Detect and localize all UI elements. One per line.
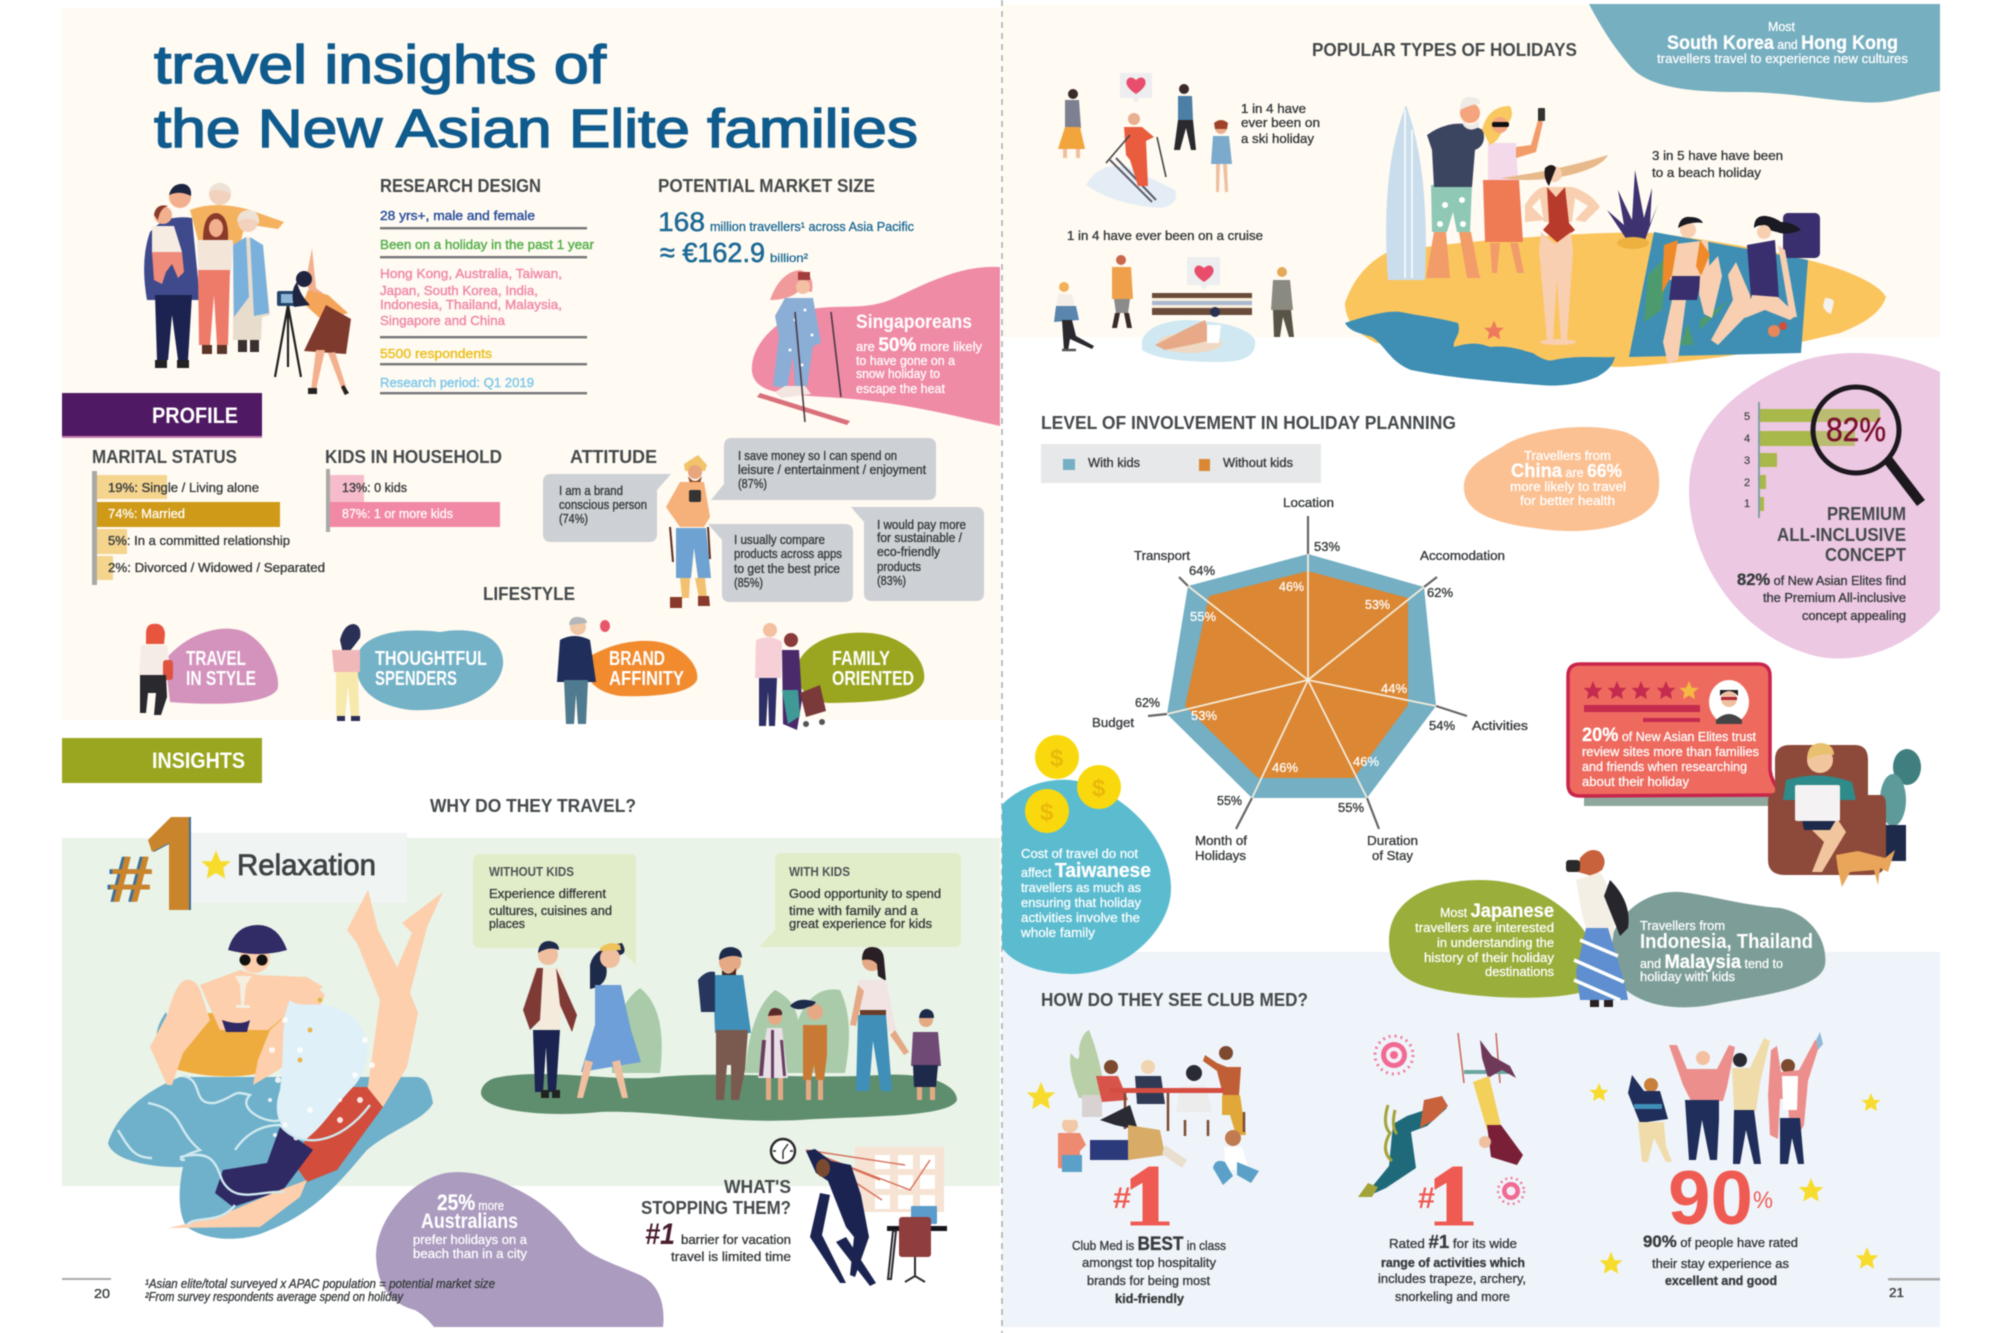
callout: Taiwanese xyxy=(1002,735,1171,974)
heading: research design: RESEARCH DESIGN xyxy=(380,176,541,196)
callout: China: more likely to travel xyxy=(1510,479,1626,494)
chart: marital status: 74%: Married xyxy=(108,506,185,521)
text: Taiwanese callout xyxy=(1020,846,1151,940)
panel: 90 percent rating xyxy=(1590,1032,1880,1288)
footer: left page number and footnotes xyxy=(62,1276,495,1304)
text: holiday condition: Been on a holiday in the past 1 year xyxy=(380,237,595,252)
stat: 168 million: 168 xyxy=(658,207,705,237)
text: Singaporeans callout: snow holiday to xyxy=(856,366,940,381)
heading: how do they see club med: HOW DO THEY SEE CLUB MED? xyxy=(1041,990,1308,1010)
callout: travel in style: IN STYLE xyxy=(186,668,256,690)
callout: sustainable products: eco-friendly xyxy=(877,544,940,559)
text: markets: Singapore and China xyxy=(380,313,506,328)
text: radar axis labels: Holidays xyxy=(1195,848,1247,863)
callout: compare products xyxy=(708,524,853,602)
text: ski holiday: 1 in 4 have xyxy=(1241,101,1306,116)
callout: without kids: WITHOUT KIDS xyxy=(489,864,574,879)
text: review sites: review sites more than families xyxy=(1582,744,1759,759)
panel: left page cream background xyxy=(62,8,1000,720)
callout: Indonesia, Thailand and Malaysia: holiday with kids xyxy=(1640,969,1736,984)
text: kid-friendly description: brands for being most xyxy=(1087,1273,1210,1288)
text: kid-friendly description xyxy=(1072,1234,1226,1306)
callout: travel in style xyxy=(139,624,278,715)
text: kid-friendly description: amongst top hospitality xyxy=(1082,1255,1216,1270)
text: radar axis labels: Transport xyxy=(1134,548,1190,563)
callout: Indonesia, Thailand and Malaysia xyxy=(1606,892,1825,1007)
callout: China: China are 66% xyxy=(1511,461,1622,482)
callout: sustainable products: for sustainable / xyxy=(877,530,962,545)
text: activities description xyxy=(1378,1232,1526,1304)
text: with kids values xyxy=(1135,539,1455,815)
chart: holiday planning radar xyxy=(1092,495,1529,863)
stat: number one xyxy=(1113,1167,1169,1225)
chart: rating bars: 4 xyxy=(1744,433,1750,445)
callout: without kids xyxy=(473,854,636,965)
stat: 90 percent: 90 xyxy=(1668,1156,1753,1241)
callout: save money: I save money so I can spend on xyxy=(738,448,897,463)
callout: brand affinity: AFFINITY xyxy=(609,668,685,690)
text: without kids values: 53% xyxy=(1365,597,1390,612)
text: Singaporeans callout: escape the heat xyxy=(856,381,945,396)
text: without kids values: 46% xyxy=(1353,754,1379,769)
text: radar axis labels: Location xyxy=(1283,495,1334,510)
stat: 90 percent: % xyxy=(1753,1187,1773,1214)
legend: radar chart: Without kids xyxy=(1223,455,1293,470)
text: without kids values: 44% xyxy=(1381,681,1407,696)
callout: brand conscious: conscious person xyxy=(559,497,647,512)
callout: South Korea and Hong Kong: travellers travel to experience new cultures xyxy=(1657,51,1909,66)
panel: premium all-inclusive concept xyxy=(1689,353,1940,659)
text: ski holiday: ever been on xyxy=(1241,115,1320,130)
panel: range of activities xyxy=(1358,1033,1526,1304)
callout: brand conscious xyxy=(543,474,671,542)
text: without kids values: 46% xyxy=(1279,579,1304,594)
text: radar axis labels xyxy=(1092,495,1529,863)
footer: right page number: 21 xyxy=(1889,1285,1904,1300)
text: Singaporeans callout: to have gone on a xyxy=(856,353,956,368)
chart: marital status: 2%: Divorced / Widowed / Separated xyxy=(108,560,325,575)
text: cruise: 1 in 4 have ever been on a cruise xyxy=(1067,228,1263,243)
title: the New Asian Elite families xyxy=(154,99,918,159)
text: markets: Japan, South Korea, India, xyxy=(380,283,538,298)
callout: brand affinity: BRAND xyxy=(609,648,665,670)
callout: without kids: Experience different xyxy=(489,886,606,901)
callout: sustainable products: I would pay more xyxy=(877,517,966,532)
callout: brand affinity xyxy=(557,617,697,724)
stat: number one: # xyxy=(108,842,152,916)
icon: star xyxy=(201,850,231,879)
callout: with kids: WITH KIDS xyxy=(789,864,850,879)
heading: profile: PROFILE xyxy=(152,403,238,428)
text: radar axis labels: Month of xyxy=(1195,833,1247,848)
text: barrier xyxy=(671,1232,791,1264)
icon: board and worker xyxy=(806,1147,947,1286)
text: radar axis labels: Accomodation xyxy=(1420,548,1505,563)
chart: marital status: 19%: Single / Living alone xyxy=(108,480,259,495)
icon: man on armchair with laptop xyxy=(1768,743,1921,887)
callout: sustainable products xyxy=(851,507,984,601)
icon: dancing friends illustration xyxy=(1628,1032,1823,1164)
heading: why do they travel: WHY DO THEY TRAVEL? xyxy=(430,796,636,816)
stat: number one: # xyxy=(1418,1182,1435,1215)
heading: what's stopping them xyxy=(641,1177,791,1218)
callout: Indonesia, Thailand and Malaysia: and Malaysia tend to xyxy=(1640,952,1783,973)
heading: lifestyle: LIFESTYLE xyxy=(483,584,575,604)
panel: kid-friendly xyxy=(1027,1030,1259,1306)
text: activities description: snorkeling and more xyxy=(1395,1289,1510,1304)
heading: insights: INSIGHTS xyxy=(152,748,245,773)
icon: coins: $ xyxy=(1050,745,1064,772)
text: ski holiday: a ski holiday xyxy=(1241,131,1315,146)
text: radar axis labels: Budget xyxy=(1092,715,1134,730)
stat: number one barrier: #1 xyxy=(645,1218,675,1251)
footer: left page number and footnotes: ²From survey respondents average spend on holiday xyxy=(145,1289,404,1304)
callout: China: for better health xyxy=(1520,493,1615,508)
icon: magnifying glass with 82%: 82% xyxy=(1826,411,1886,448)
text: review sites xyxy=(1582,725,1759,789)
callout: Australians: prefer holidays on a xyxy=(413,1232,528,1247)
heading: premium concept: CONCEPT xyxy=(1825,545,1906,565)
callout: compare products: I usually compare xyxy=(734,532,825,547)
text: kid-friendly description: Club Med is BEST in class xyxy=(1072,1234,1226,1255)
callout: Australians: beach than in a city xyxy=(413,1246,527,1261)
text: Singaporeans callout: are 50% more likely xyxy=(856,335,982,356)
chart: rating bars: 1 xyxy=(1744,498,1750,510)
callout: thoughtful spenders xyxy=(332,624,503,721)
callout: Japanese: Most Japanese xyxy=(1440,901,1554,922)
text: rating description: their stay experience as xyxy=(1652,1256,1789,1271)
callout: brand conscious: I am a brand xyxy=(559,483,623,498)
stat: 162.9 billion: ≈ €162.9 xyxy=(660,237,765,268)
text: rating description xyxy=(1643,1232,1798,1288)
panel: attitude xyxy=(543,438,984,608)
text: with kids values: 55% xyxy=(1338,800,1364,815)
heading: level of involvement: LEVEL OF INVOLVEMENT IN HOLIDAY PLANNING xyxy=(1041,413,1456,433)
text: with kids values: 55% xyxy=(1217,793,1242,808)
callout: travel in style: TRAVEL xyxy=(186,648,246,670)
legend: radar chart: With kids xyxy=(1088,455,1140,470)
callout: Australians: Australians xyxy=(421,1210,518,1233)
text: Taiwanese callout: affect Taiwanese xyxy=(1021,860,1151,882)
text: radar axis labels: Activities xyxy=(1472,718,1529,733)
callout: South Korea and Hong Kong xyxy=(1589,4,1940,103)
callout: thoughtful spenders: SPENDERS xyxy=(375,668,457,690)
text: Taiwanese callout: activities involve the xyxy=(1021,910,1140,925)
text: without kids values: 46% xyxy=(1272,760,1298,775)
text: premium description xyxy=(1737,570,1906,623)
panel: potential market size xyxy=(658,176,914,268)
title: travel insights of xyxy=(154,35,607,95)
callout: save money: (87%) xyxy=(738,476,767,491)
icon: trapeze and diver illustration xyxy=(1358,1033,1524,1204)
text: Taiwanese callout: Cost of travel do not xyxy=(1021,846,1138,861)
callout: Japanese: travellers are interested xyxy=(1415,920,1554,935)
callout: Japanese: in understanding the xyxy=(1437,935,1554,950)
callout: compare products: (85%) xyxy=(734,575,763,590)
callout: without kids: cultures, cuisines and xyxy=(489,903,612,918)
panel: right page blue band xyxy=(1002,952,1940,1327)
icon: celebration stars xyxy=(1590,1083,1880,1274)
text: markets xyxy=(380,266,562,328)
callout: save money xyxy=(711,438,936,500)
chart: marital status xyxy=(92,447,325,585)
text: beach holiday: 3 in 5 have have been xyxy=(1652,148,1783,163)
text: million travellers: million travellers¹ across Asia Pacific xyxy=(710,220,914,234)
text: kid-friendly description: kid-friendly xyxy=(1115,1291,1185,1306)
callout: save money: leisure / entertainment / enjoyment xyxy=(738,462,926,477)
callout: Australians xyxy=(376,1172,664,1327)
text: billion: billion² xyxy=(770,251,808,265)
text: barrier: barrier for vacation xyxy=(681,1232,791,1247)
text: rating description: 90% of people have rated xyxy=(1643,1232,1798,1251)
callout: family oriented: FAMILY xyxy=(832,648,891,670)
chart: marital status: 5%: In a committed relationship xyxy=(108,533,290,548)
chart: rating bars: 2 xyxy=(1744,477,1750,489)
heading: premium concept: ALL-INCLUSIVE xyxy=(1777,525,1906,545)
callout: with kids: time with family and a xyxy=(789,903,919,918)
callout: brand conscious: (74%) xyxy=(559,511,588,526)
text: without kids values: 53% xyxy=(1191,708,1217,723)
callout: China: Travellers from xyxy=(1524,448,1611,463)
chart: kids in household xyxy=(325,447,502,532)
text: review sites: about their holiday xyxy=(1582,774,1689,789)
icon: woman photographer xyxy=(1566,850,1629,1007)
icon: magnifying glass with 82% xyxy=(1813,387,1921,503)
text: without kids values xyxy=(1190,579,1407,775)
icon: man relaxing in swimming pool xyxy=(108,890,443,1239)
icon: coins: $ xyxy=(1092,775,1106,802)
text: with kids values: 64% xyxy=(1189,563,1215,578)
stat: number one: # xyxy=(1113,1182,1131,1215)
callout: compare products: products across apps xyxy=(734,546,842,561)
text: Taiwanese callout: ensuring that holiday xyxy=(1021,895,1141,910)
callout: without kids: places xyxy=(489,916,525,931)
text: beach holiday xyxy=(1652,148,1783,180)
text: sample: 28 yrs+, male and female xyxy=(380,208,535,223)
callout: Japanese: history of their holiday xyxy=(1424,950,1555,965)
callout: with kids xyxy=(759,853,961,947)
heading: what's stopping them: WHAT'S xyxy=(724,1177,791,1197)
callout: Indonesia, Thailand and Malaysia: Indonesia, Thailand xyxy=(1640,931,1813,953)
icon: rating stars xyxy=(1584,681,1698,699)
text: with kids values: 53% xyxy=(1314,539,1340,554)
heading: attitude: ATTITUDE xyxy=(570,447,657,467)
icon: family group and photographer illustration xyxy=(144,183,351,395)
icon: couple xyxy=(523,941,641,1098)
text: markets: Indonesia, Thailand, Malaysia, xyxy=(380,297,562,312)
callout: Australians: 25% more xyxy=(437,1190,504,1215)
panel: what's stopping them xyxy=(641,1139,947,1286)
chart: rating bars: 5 xyxy=(1744,411,1750,423)
callout: South Korea and Hong Kong: Most xyxy=(1768,19,1795,34)
heading: marital status: MARITAL STATUS xyxy=(92,447,237,467)
text: Taiwanese callout: travellers as much as xyxy=(1021,880,1141,895)
icon: coins: $ xyxy=(1040,799,1054,826)
text: respondents: 5500 respondents xyxy=(380,346,493,361)
footer: left page number and footnotes: 20 xyxy=(94,1286,110,1301)
callout: family oriented: ORIENTED xyxy=(832,668,914,690)
callout: with kids: great experience for kids xyxy=(789,916,932,931)
callout: Japanese: destinations xyxy=(1485,964,1554,979)
stat: number one xyxy=(105,817,191,916)
text: with kids values: 62% xyxy=(1427,585,1453,600)
stat: number one: # xyxy=(105,842,149,916)
text: relaxation: Relaxation xyxy=(237,849,376,882)
text: premium description: the Premium All-inclusive xyxy=(1763,590,1906,605)
text: barrier: travel is limited time xyxy=(671,1249,791,1264)
text: markets: Hong Kong, Australia, Taiwan, xyxy=(380,266,562,281)
icon: coins xyxy=(1025,735,1121,833)
callout: thoughtful spenders: THOUGHTFUL xyxy=(375,648,487,670)
text: with kids values: 54% xyxy=(1429,718,1455,733)
text: review sites: 20% of New Asian Elites trust xyxy=(1582,725,1756,746)
panel: lifestyle xyxy=(139,584,924,730)
icon: beach scene xyxy=(1345,97,1886,386)
icon: skier xyxy=(757,270,850,425)
text: premium description: concept appealing xyxy=(1802,608,1906,623)
icon: hiker with camera xyxy=(666,455,711,608)
heading: what's stopping them: STOPPING THEM? xyxy=(641,1198,791,1218)
icon: ski holiday group xyxy=(1058,73,1232,208)
heading: premium concept: PREMIUM xyxy=(1827,504,1906,524)
icon: couple and family illustration xyxy=(481,941,957,1121)
callout: sustainable products: products xyxy=(877,559,921,574)
text: Singaporeans callout xyxy=(856,312,982,396)
panel: left page green band xyxy=(62,838,1000,1186)
chart: kids in household: 13%: 0 kids xyxy=(342,480,407,495)
callout: with kids: Good opportunity to spend xyxy=(789,886,941,901)
panel: right page cream background xyxy=(1002,5,1940,337)
heading: premium concept xyxy=(1777,504,1906,565)
callout: China xyxy=(1464,427,1659,531)
callout: Japanese xyxy=(1389,880,1590,998)
footer: right page number xyxy=(1888,1278,1940,1300)
text: with kids values: 62% xyxy=(1135,695,1160,710)
callout: compare products: to get the best price xyxy=(734,561,840,576)
icon: clock xyxy=(771,1139,795,1163)
chart: kids in household: 87%: 1 or more kids xyxy=(342,506,453,521)
heading: kids in household: KIDS IN HOUSEHOLD xyxy=(325,447,502,467)
panel: relaxation number one xyxy=(105,817,407,916)
icon: family xyxy=(698,947,941,1100)
chart: rating bars xyxy=(1744,402,1880,518)
icon: cruise group xyxy=(1054,255,1294,362)
heading: potential market size: POTENTIAL MARKET SIZE xyxy=(658,176,875,196)
icon: family at table illustration xyxy=(1027,1030,1259,1185)
footer: left page number and footnotes: ¹Asian elite/total surveyed x APAC population = potential market size xyxy=(145,1276,495,1291)
callout: family oriented xyxy=(755,623,924,730)
chart: rating bars: 3 xyxy=(1744,455,1750,467)
text: ski holiday xyxy=(1241,101,1320,146)
icon: reviewer avatar xyxy=(1709,680,1749,724)
text: activities description: range of activities which xyxy=(1381,1255,1525,1270)
text: beach holiday: to a beach holiday xyxy=(1652,165,1762,180)
title xyxy=(154,35,918,159)
callout: review sites xyxy=(1568,664,1784,806)
text: without kids values: 55% xyxy=(1190,609,1216,624)
stat: number one xyxy=(1418,1167,1473,1225)
callout: South Korea and Hong Kong: South Korea and Hong Kong xyxy=(1667,33,1898,54)
heading: popular types of holidays: POPULAR TYPES OF HOLIDAYS xyxy=(1312,40,1577,60)
callout: sustainable products: (83%) xyxy=(877,573,906,588)
text: radar axis labels: Duration xyxy=(1367,833,1418,848)
text: period: Research period: Q1 2019 xyxy=(380,375,534,390)
callout: Singaporeans xyxy=(752,267,1000,426)
text: Taiwanese callout: whole family xyxy=(1020,925,1096,940)
text: premium description: 82% of New Asian Elites find xyxy=(1737,570,1906,589)
text: Singaporeans callout: Singaporeans xyxy=(856,312,972,333)
callout: Indonesia, Thailand and Malaysia: Travellers from xyxy=(1640,918,1725,933)
text: rating description: excellent and good xyxy=(1665,1273,1777,1288)
heading: profile xyxy=(62,393,262,438)
heading: insights xyxy=(62,738,262,783)
text: activities description: Rated #1 for its wide xyxy=(1389,1232,1517,1252)
text: activities description: includes trapeze, archery, xyxy=(1378,1271,1526,1286)
panel: research design xyxy=(380,176,595,394)
legend: radar chart xyxy=(1041,444,1321,483)
text: review sites: and friends when researching xyxy=(1582,759,1747,774)
text: radar axis labels: of Stay xyxy=(1372,848,1414,863)
